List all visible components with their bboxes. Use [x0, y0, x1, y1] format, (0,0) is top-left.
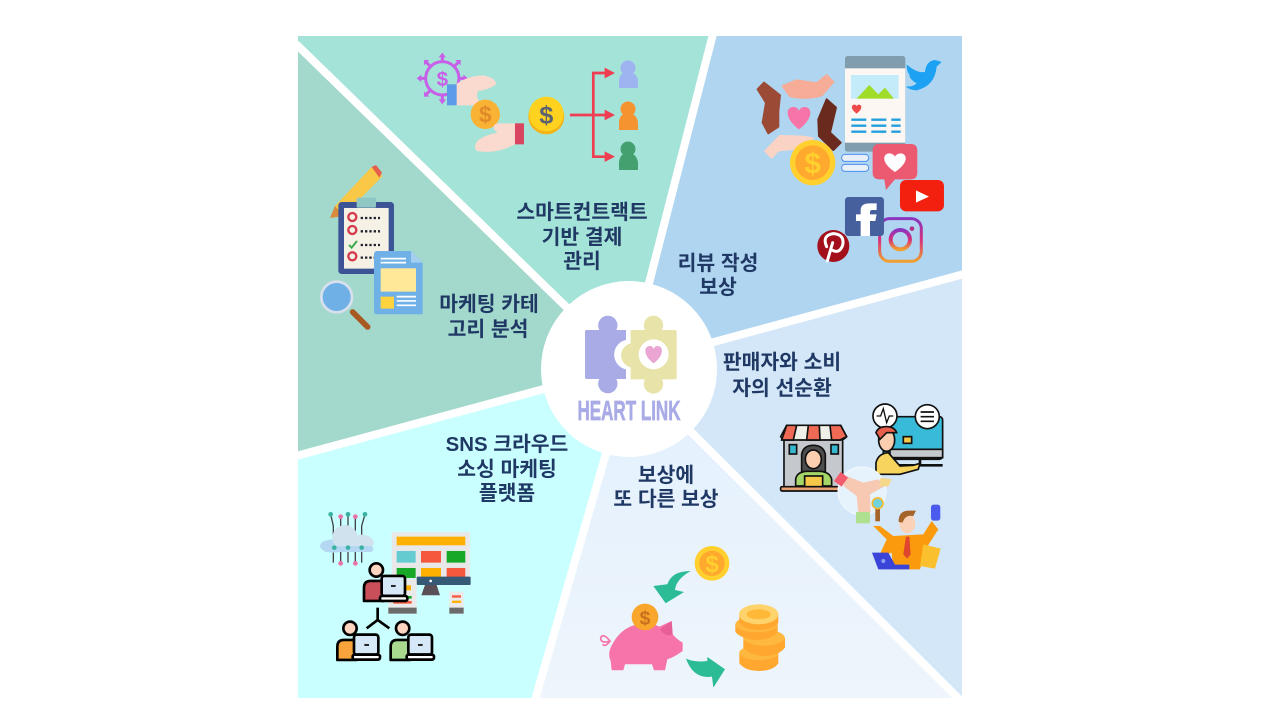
heading: marketing category analysis: 고리 분석	[448, 318, 528, 341]
icon: monitor dashboard	[392, 532, 471, 595]
icon: seller shop, consumer and handshake illustration	[781, 404, 943, 569]
arrow: piggy bank to coins	[686, 657, 725, 688]
icon: smart contract payment illustration	[417, 53, 638, 170]
panel: marketing category analysis wedge	[298, 44, 629, 455]
panel: seller and consumer cycle wedge	[629, 274, 962, 698]
icon: youtube	[900, 180, 944, 211]
icon: joined hands	[834, 467, 892, 523]
icon: social review illustration	[758, 56, 944, 262]
heading: seller consumer cycle: 판매자와 소비	[723, 351, 841, 374]
heading: SNS crowdsourcing marketing platform: 플랫폼	[479, 482, 535, 505]
icon: coin, piggy bank and coin stack	[601, 546, 785, 688]
icon: piggy bank: $	[640, 608, 651, 629]
icon: facebook	[845, 197, 884, 236]
icon: consumer at computer	[873, 404, 943, 474]
icon: cloud and platform team illustration	[320, 512, 471, 660]
panel: SNS crowdsourcing wedge	[298, 365, 629, 698]
icon: coin stack	[735, 604, 785, 671]
heading: review reward: 보상	[699, 276, 737, 299]
heading: reward on reward: 또 다른 보상	[613, 488, 719, 511]
icon: businessman	[872, 498, 941, 569]
icon: smart contract payment illustration: $	[437, 68, 449, 91]
arrow: coin to piggy bank	[653, 571, 691, 603]
heading: smart contract payment: 기반 결제	[542, 226, 622, 249]
icon: heart speech bubble	[873, 144, 917, 190]
heading: smart contract payment: 스마트컨트랙트	[516, 201, 648, 224]
icon: smart contract payment illustration: $	[539, 101, 553, 129]
icon: social review illustration: $	[804, 147, 821, 180]
icon: central logo Heart Link: HEART LINK	[578, 395, 680, 426]
panel: review reward wedge	[629, 36, 962, 365]
icon: twitter bird	[906, 60, 942, 90]
heading: SNS crowdsourcing marketing platform: 소싱 마케팅	[457, 458, 557, 481]
icon: shop with seller	[781, 425, 847, 491]
heading: SNS crowdsourcing marketing platform: SNS 크라우드	[446, 433, 568, 456]
icon: coin, piggy bank and coin stack: $	[705, 551, 719, 578]
icon: team of three with laptops	[337, 563, 434, 660]
icon: instagram	[880, 219, 921, 261]
panel: smart contract payment wedge	[298, 36, 713, 365]
heading: smart contract payment: 관리	[563, 250, 601, 273]
heading: marketing category analysis: 마케팅 카테	[439, 293, 539, 316]
icon: checklist, document and magnifier	[321, 165, 423, 327]
icon: piggy bank	[601, 604, 683, 670]
panel: reward on reward wedge	[535, 370, 958, 698]
icon: pinterest	[817, 230, 849, 262]
icon: tablet and phone	[388, 579, 464, 614]
icon: central logo Heart Link	[541, 281, 717, 457]
heading: seller consumer cycle: 자의 선순환	[732, 377, 832, 400]
icon: smart contract payment illustration: $	[479, 102, 492, 128]
heading: reward on reward: 보상에	[638, 464, 694, 487]
heading: review reward: 리뷰 작성	[678, 252, 758, 275]
